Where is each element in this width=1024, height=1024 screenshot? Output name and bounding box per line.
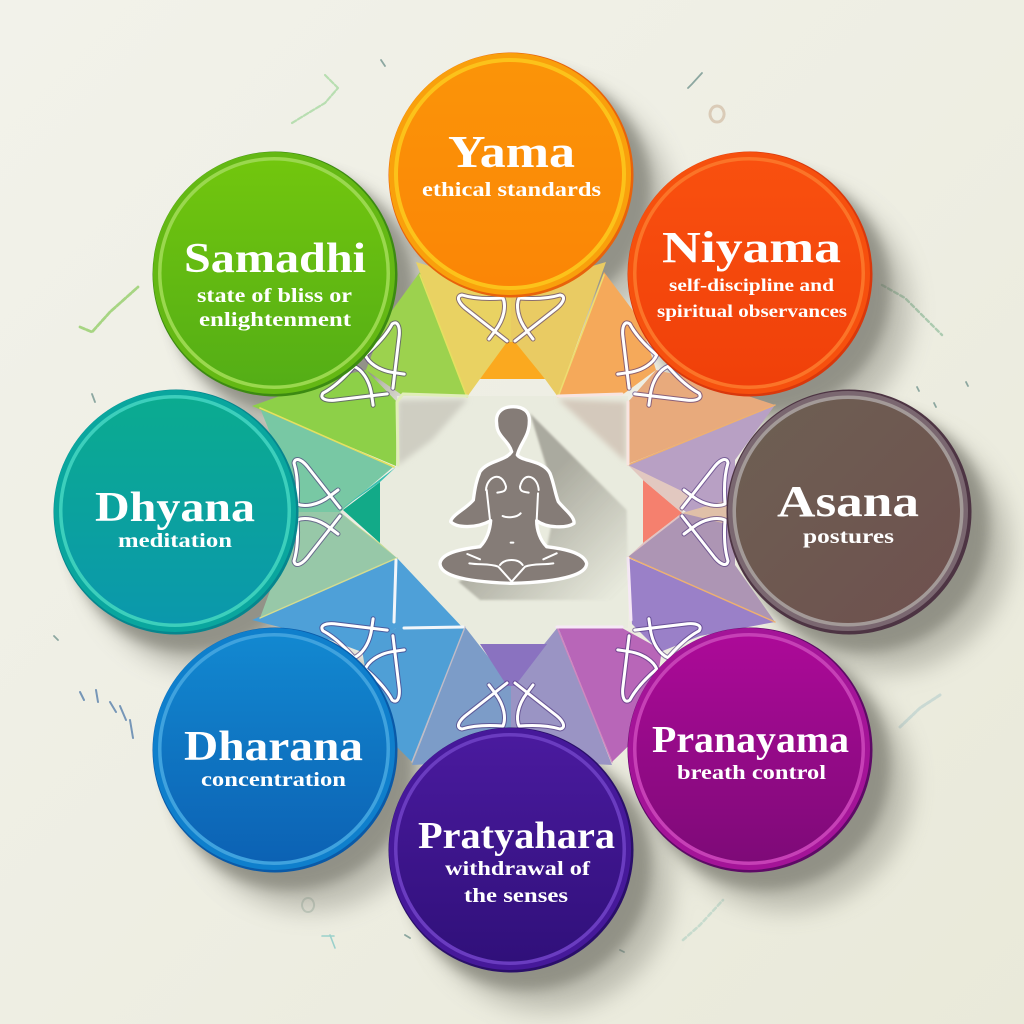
wedges: right, Niyama and Asana side [628,370,775,652]
panel: Asana [726,390,972,634]
inner wedge shading [397,399,626,466]
wedges: top, Yama side [366,262,656,397]
disc [54,390,298,634]
panel: Pratyahara [388,728,634,972]
title and description: Dharana [184,724,363,770]
title and description: Niyama [662,223,841,272]
title and description: Samadhi [184,236,366,282]
panel: Niyama: spiritual observances [657,301,847,321]
central panel [380,396,643,644]
icon: meditating figure [440,407,628,600]
panel: Dhyana [54,390,298,634]
panel: Niyama: self-discipline and [669,275,834,295]
wedges: left, Dharana and Dhyana side [252,370,463,652]
disc [388,728,634,972]
scattered background marks [54,60,968,952]
panel: Samadhi: enlightenment [199,309,351,331]
figure silhouette [440,407,587,583]
disc [628,152,872,396]
panel: Pratyahara: the senses [464,885,568,907]
panel: Dhyana: meditation [118,530,232,552]
ornamental loops [294,295,728,729]
panel: Pranayama [628,628,872,872]
panel: Asana: postures [803,526,894,548]
figure long shadow [458,413,628,600]
title and description: Pratyahara [418,815,615,857]
panel: Pratyahara: withdrawal of [445,858,590,880]
wedge edge highlights [260,275,775,762]
disc [388,52,634,298]
panel: Dharana: concentration [201,769,346,791]
panel: Niyama [628,152,872,396]
panel: Yama: ethical standards [422,179,601,201]
title and description: Yama [448,126,575,177]
title and description: Dhyana [95,485,255,531]
panel: Samadhi: state of bliss or [197,285,352,307]
title and description: Pranayama [652,719,849,761]
panel: Pranayama: breath control [677,762,827,784]
panel: Samadhi [152,152,398,396]
panel: Dharana [152,628,398,872]
title and description: Asana [777,477,919,526]
disc [726,390,972,634]
coloured connector wedges [252,262,775,765]
disc [152,152,398,396]
panel: Yama [388,52,634,298]
disc [628,628,872,872]
disc [152,628,398,872]
figure inner lines [467,477,557,582]
wedges: bottom, Pratyahara side [362,627,662,765]
